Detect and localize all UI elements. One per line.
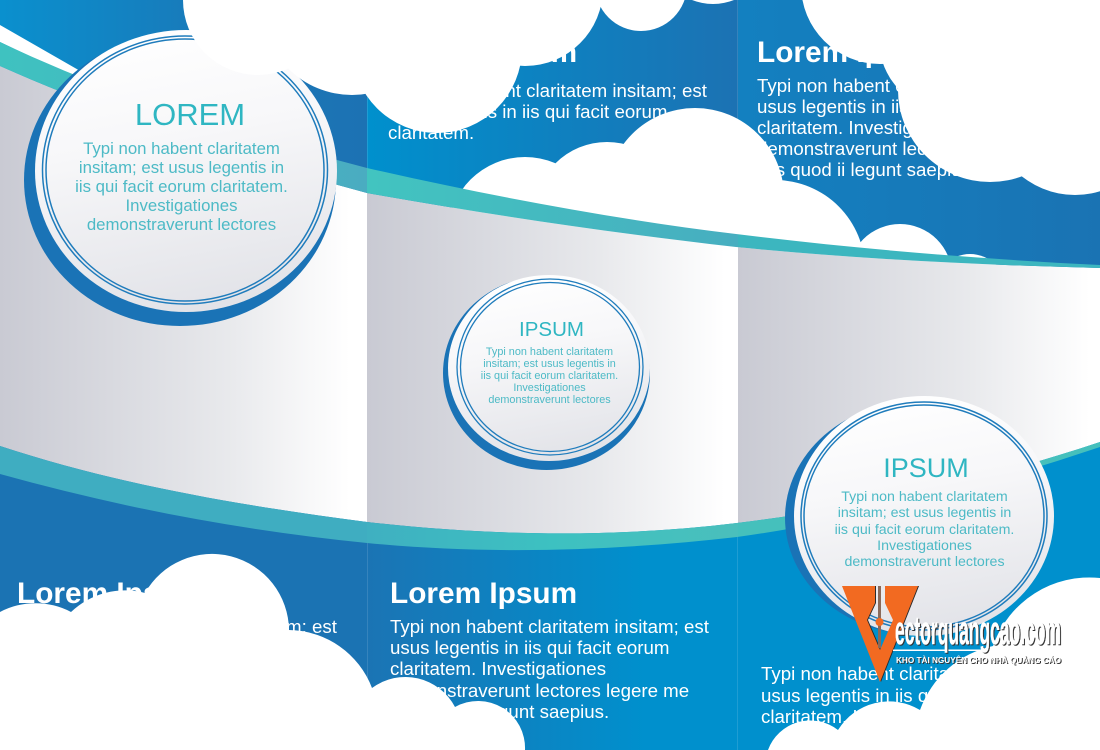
circle callout: LOREM: Investigationes xyxy=(126,196,237,215)
text block: bottom right column: usus legentis in iis qui facit eorum xyxy=(761,685,1040,706)
circle callout: IPSUM centre: iis qui facit eorum claritatem. xyxy=(481,370,618,382)
teal wave: bottom xyxy=(0,442,1100,550)
circle callout: LOREM: insitam; est usus legentis in xyxy=(79,158,284,177)
circle callout: IPSUM right: iis qui facit eorum claritatem. xyxy=(835,522,1014,538)
text block: bottom right column: Typi non habent claritatem insitam; est xyxy=(761,663,1081,684)
text block: bottom middle column xyxy=(390,577,710,722)
panel: white folded band xyxy=(0,66,1100,534)
cloud: top centre xyxy=(183,0,770,133)
white strip above the top-left wave xyxy=(0,25,110,88)
circle callout: IPSUM centre: Investigationes xyxy=(513,382,586,394)
circle callout: IPSUM centre: Typi non habent claritatem xyxy=(486,346,613,358)
text block: top right column: Lorem Ipsum xyxy=(757,36,944,69)
circle callout: IPSUM centre: insitam; est usus legentis in xyxy=(483,358,616,370)
logo: Vectorquangcao.com: KHO TÀI NGUYÊN CHO NHÀ QUẢNG CÁO xyxy=(896,654,1061,665)
circle callout: IPSUM centre: demonstraverunt lectores xyxy=(488,394,611,406)
text block: top middle column: Lorem Ipsum xyxy=(390,36,577,69)
circle callout: LOREM: demonstraverunt lectores xyxy=(87,215,276,234)
text block: bottom middle column: claritatem. Investigationes xyxy=(390,658,606,679)
circle callout: LOREM: LOREM xyxy=(135,97,245,132)
circle callout: IPSUM right xyxy=(785,396,1054,636)
logo: Vectorquangcao.com xyxy=(842,586,1061,682)
text block: top right column: claritatem. Investigationes xyxy=(757,117,973,138)
text block: bottom middle column: Lorem Ipsum xyxy=(390,577,577,610)
cloud: top right xyxy=(801,0,1100,195)
text block: bottom left column: Typi non habent claritatem insitam; est xyxy=(18,616,338,637)
circle callout: IPSUM right: IPSUM xyxy=(883,453,969,483)
text block: bottom left column xyxy=(17,577,338,637)
text block: top middle column xyxy=(388,36,708,143)
cloud: bottom right xyxy=(768,577,1100,750)
text block: bottom middle column: lius quod ii legunt saepius. xyxy=(390,701,609,722)
teal wave: top xyxy=(0,42,1100,268)
circle callout: LOREM: Typi non habent claritatem xyxy=(83,139,280,158)
text block: bottom right column: claritatem. Investigationes xyxy=(761,706,977,727)
circle callout: IPSUM centre xyxy=(443,275,650,470)
text block: bottom middle column: usus legentis in iis qui facit eorum xyxy=(390,637,669,658)
text block: bottom left column: Lorem Ipsum xyxy=(17,577,204,610)
cloud: middle cloud behind the band xyxy=(448,108,1006,360)
text block: bottom middle column: Typi non habent claritatem insitam; est xyxy=(390,616,710,637)
circle callout: IPSUM right: insitam; est usus legentis in xyxy=(838,505,1011,521)
text block: top middle column: claritatem. xyxy=(388,122,474,143)
text block: top right column: demonstraverunt lectores legere me xyxy=(757,138,1056,159)
text block: top right column: usus legentis in iis qui facit eorum xyxy=(757,96,1036,117)
text block: top middle column: Typi non habent claritatem insitam; est xyxy=(388,80,708,101)
text block: bottom right column xyxy=(761,663,1081,727)
text block: top middle column: usus legentis in iis qui facit eorum xyxy=(388,101,667,122)
circle callout: LOREM xyxy=(24,30,337,326)
cloud: bottom left xyxy=(0,554,525,750)
text block: top right column: Typi non habent claritatem insitam; est xyxy=(757,75,1077,96)
text block: top right column: lius quod ii legunt saepius. xyxy=(757,159,976,180)
circle callout: IPSUM right: demonstraverunt lectores xyxy=(844,554,1005,570)
circle callout: IPSUM centre: IPSUM xyxy=(519,318,584,341)
text block: bottom middle column: demonstraverunt lectores legere me xyxy=(390,680,689,701)
circle callout: IPSUM right: Typi non habent claritatem xyxy=(841,489,1008,505)
circle callout: LOREM: iis qui facit eorum claritatem. xyxy=(75,177,288,196)
circle callout: IPSUM right: Investigationes xyxy=(877,538,972,554)
text block: top right column xyxy=(757,36,1077,180)
